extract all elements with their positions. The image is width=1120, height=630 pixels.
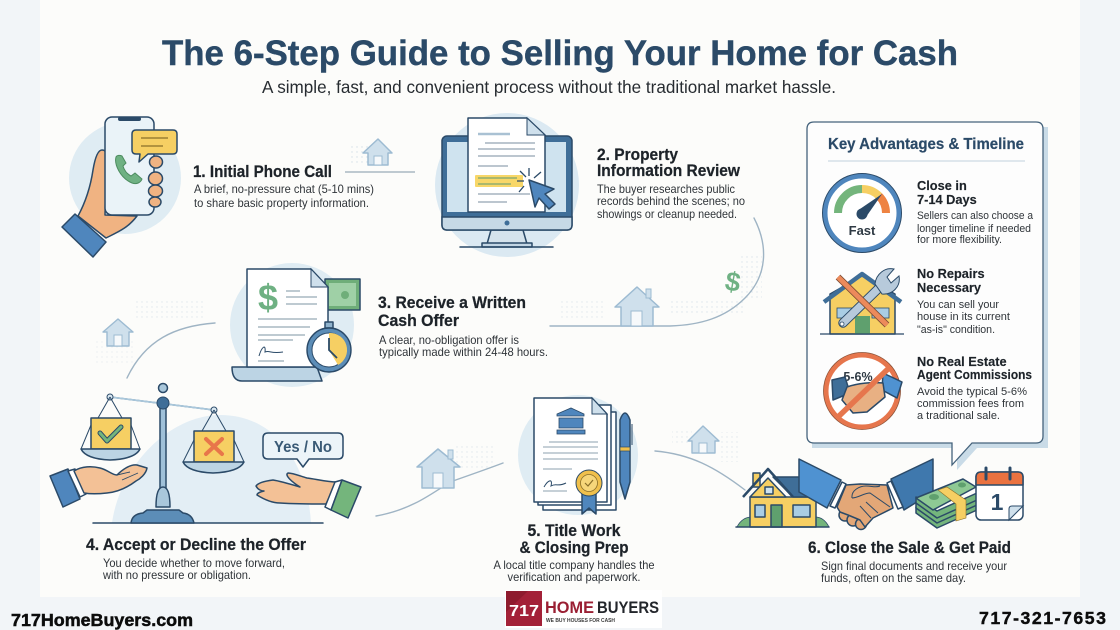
panel heading: Key Advantages & Timeline	[828, 136, 1024, 153]
benefit: no real estate agent commissions	[917, 354, 1032, 422]
benefit: close in 7-14 days	[917, 178, 1034, 246]
heading: 4. Accept or Decline the Offer	[86, 536, 307, 554]
benefit: no real estate agent commissions: commission fees from	[917, 398, 1024, 410]
logo: 717 home buyers: HOME	[545, 598, 594, 617]
icon: title documents, seal and pen	[518, 395, 638, 515]
heading: 3. Receive a Written	[378, 294, 526, 312]
heading: 2. Property	[597, 146, 679, 164]
icon: balance scale and hands	[50, 384, 361, 523]
benefit: close in 7-14 days: for more flexibility.	[917, 234, 1002, 246]
step 1: initial phone call	[62, 117, 374, 257]
heading: & Closing Prep	[520, 539, 628, 557]
benefit: close in 7-14 days: 7-14 Days	[917, 192, 977, 207]
benefit: close in 7-14 days: Close in	[917, 178, 967, 193]
icon: hand holding phone	[62, 117, 181, 257]
description: A brief, no-pressure chat (5-10 mins)	[194, 183, 374, 196]
connector: house and line 1 to 2	[345, 139, 415, 172]
logo: 717 home buyers: BUYERS	[597, 598, 659, 617]
benefit: no real estate agent commissions: Agent Commissions	[917, 367, 1032, 382]
logo: 717 home buyers: 717	[509, 603, 539, 620]
speech label: Yes / No	[274, 439, 332, 456]
description: You decide whether to move forward,	[103, 557, 285, 570]
icon: speedometer: Fast	[849, 223, 876, 238]
description: The buyer researches public	[597, 183, 735, 196]
description: showings or cleanup needed.	[597, 208, 737, 221]
heading: Cash Offer	[378, 312, 460, 330]
connector: curve and house 5 to 6	[655, 426, 745, 490]
icon: no commission handshake: 5-6%	[843, 370, 873, 384]
connector: curve and house 3 to 4	[93, 298, 215, 378]
icon: speedometer	[822, 174, 902, 252]
icon: house with wrench crossed out	[820, 269, 904, 334]
description: to share basic property information.	[194, 197, 369, 210]
benefit: no repairs necessary: house in its current	[917, 311, 1011, 323]
connector: curve and house 4 to 5	[376, 443, 503, 516]
heading: 6. Close the Sale & Get Paid	[808, 539, 1011, 557]
icon: offer document with cash and stopwatch	[230, 263, 360, 387]
benefit: no repairs necessary	[917, 266, 1011, 336]
benefit: close in 7-14 days: longer timeline if needed	[917, 223, 1031, 235]
logo: 717 home buyers: WE BUY HOUSES FOR CASH	[546, 618, 615, 624]
icon: house	[736, 469, 829, 527]
heading: Information Review	[597, 162, 740, 180]
icon: calendar: 1	[991, 489, 1004, 515]
benefit: no real estate agent commissions: Avoid the typical 5-6%	[917, 386, 1027, 398]
description: A local title company handles the	[494, 559, 654, 572]
benefit: no real estate agent commissions: No Real Estate	[917, 354, 1007, 369]
footer website: 717HomeBuyers.com	[11, 610, 193, 630]
benefit: no repairs necessary: You can sell your	[917, 299, 999, 311]
step 2: property information review	[435, 113, 745, 257]
icon: handshake	[799, 459, 933, 530]
step 6: close the sale and get paid	[736, 459, 1023, 585]
icon: no commission handshake	[824, 352, 902, 430]
step 3: receive a written cash offer	[230, 263, 548, 387]
description: typically made within 24-48 hours.	[379, 346, 548, 359]
benefit: no repairs necessary: No Repairs	[917, 266, 985, 281]
benefit: no repairs necessary: Necessary	[917, 280, 982, 295]
description: Sign final documents and receive your	[821, 560, 1007, 573]
icon: stack of cash	[916, 479, 977, 528]
description: funds, often on the same day.	[821, 572, 966, 585]
benefit: no real estate agent commissions: a traditional sale.	[917, 410, 1000, 422]
heading: 1. Initial Phone Call	[193, 163, 332, 181]
benefit: close in 7-14 days: Sellers can also choose a	[917, 210, 1034, 222]
icon: monitor with document	[435, 113, 579, 257]
heading: 5. Title Work	[528, 522, 621, 540]
description: with no pressure or obligation.	[102, 569, 251, 582]
icon: dollar sign: $	[723, 266, 743, 298]
logo: 717 home buyers	[505, 590, 662, 628]
description: A clear, no-obligation offer is	[379, 334, 519, 347]
step 4: accept or decline the offer	[50, 384, 361, 582]
icon: house	[615, 287, 659, 326]
footer phone: 717-321-7653	[979, 608, 1106, 628]
step 5: title work and closing prep	[494, 395, 654, 584]
panel: key advantages and timeline	[807, 122, 1048, 470]
connector: curve with dollar and house 2 to 3	[550, 218, 764, 326]
benefit: no repairs necessary: "as-is" condition.	[917, 324, 995, 336]
subtitle: A simple, fast, and convenient process without the traditional market hassle.	[262, 77, 836, 97]
description: records behind the scenes; no	[597, 195, 745, 208]
title: The 6-Step Guide to Selling Your Home for Cash	[162, 34, 958, 73]
icon: calendar	[976, 468, 1023, 520]
description: verification and paperwork.	[508, 571, 640, 584]
icon: offer document with cash and stopwatch: $	[258, 277, 278, 318]
